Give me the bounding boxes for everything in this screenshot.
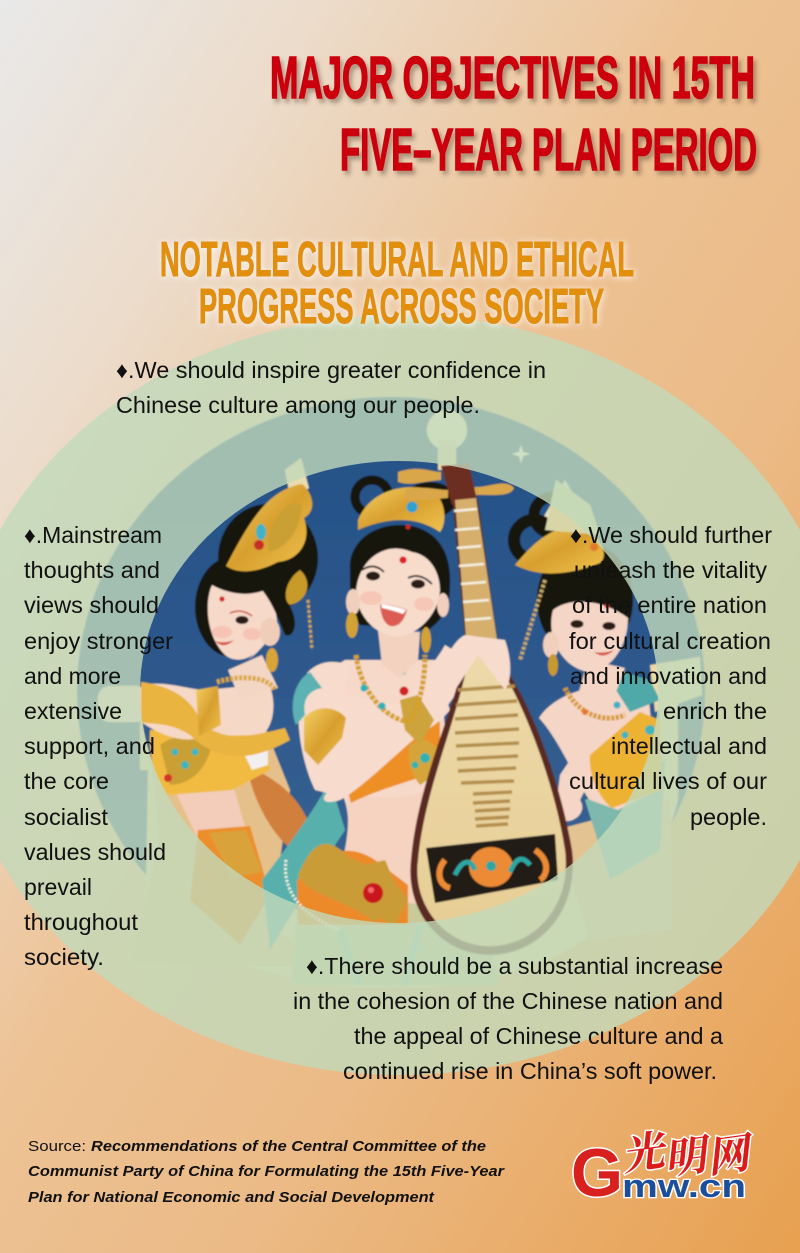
- text block: mainstream thoughts: extensive: [24, 698, 122, 724]
- source note: Recommendations of the Central Committee of the: [91, 1138, 486, 1155]
- text block: cohesion and soft power: the appeal of Chinese culture and a: [354, 1023, 723, 1049]
- text block: cultural creation: enrich the: [663, 698, 767, 724]
- logo: gmw.cn: [571, 1117, 758, 1211]
- source note: Plan for National Economic and Social Development: [28, 1189, 435, 1206]
- logo: gmw.cn: G: [571, 1135, 623, 1211]
- text block: cultural creation: of the entire nation: [572, 592, 767, 618]
- text block: cohesion and soft power: ♦.There should be a substantial increase: [306, 953, 723, 979]
- text block: cohesion and soft power: in the cohesion of the Chinese nation and: [293, 988, 723, 1014]
- text block: mainstream thoughts: views should: [24, 592, 159, 618]
- text block: mainstream thoughts: socialist: [24, 804, 109, 830]
- logo: gmw.cn: 网: [702, 1119, 758, 1186]
- left dancer: [130, 484, 345, 965]
- night-blue backdrop circle: [77, 397, 705, 985]
- text block: cultural creation: people.: [690, 804, 767, 830]
- flowing skirts seen through the veil: [140, 692, 678, 988]
- text block: cultural creation: cultural lives of our: [569, 768, 767, 794]
- text block: mainstream thoughts: [24, 522, 173, 970]
- logo: gmw.cn: 明: [659, 1121, 716, 1188]
- text block: cultural creation: ♦.We should further: [570, 522, 772, 548]
- source note: [28, 1138, 505, 1206]
- illustration: three dancers with pipa: [77, 397, 705, 988]
- source note: Communist Party of China for Formulating the 15th Five-Year: [28, 1163, 505, 1180]
- source note: Source:: [28, 1138, 86, 1155]
- title: [270, 45, 757, 183]
- text block: cultural creation: unleash the vitality: [574, 557, 767, 583]
- text block: confidence in Chinese culture: Chinese culture among our people.: [116, 392, 480, 418]
- logo: gmw.cn: 光: [617, 1117, 671, 1183]
- text block: mainstream thoughts: support, and: [24, 733, 155, 759]
- pipa lute: [410, 463, 573, 955]
- text block: confidence in Chinese culture: ♦.We should inspire greater confidence in: [116, 357, 546, 383]
- ghost ornaments above the circle: [98, 410, 702, 722]
- text block: mainstream thoughts: society.: [24, 944, 104, 970]
- text block: mainstream thoughts: enjoy stronger: [24, 628, 173, 654]
- text block: mainstream thoughts: thoughts and: [24, 557, 160, 583]
- logo: gmw.cn: mw.cn: [622, 1168, 746, 1204]
- right dancer: [514, 480, 672, 940]
- text block: mainstream thoughts: throughout: [24, 909, 139, 935]
- text block: mainstream thoughts: ♦.Mainstream: [24, 522, 162, 548]
- section heading: [160, 233, 634, 334]
- text block: mainstream thoughts: values should: [24, 839, 166, 865]
- text block: cohesion and soft power: [293, 953, 723, 1084]
- text block: cultural creation: [569, 522, 772, 830]
- text block: confidence in Chinese culture: [116, 357, 546, 418]
- text block: mainstream thoughts: prevail: [24, 874, 92, 900]
- text block: cultural creation: and innovation and: [570, 663, 767, 689]
- center dancer: [262, 469, 514, 985]
- text block: mainstream thoughts: and more: [24, 663, 121, 689]
- translucent green ellipse with clear window: [0, 315, 800, 1075]
- text block: cohesion and soft power: continued rise in China’s soft power.: [343, 1058, 717, 1084]
- text block: cultural creation: for cultural creation: [569, 628, 771, 654]
- text block: cultural creation: intellectual and: [611, 733, 767, 759]
- text block: mainstream thoughts: the core: [24, 768, 109, 794]
